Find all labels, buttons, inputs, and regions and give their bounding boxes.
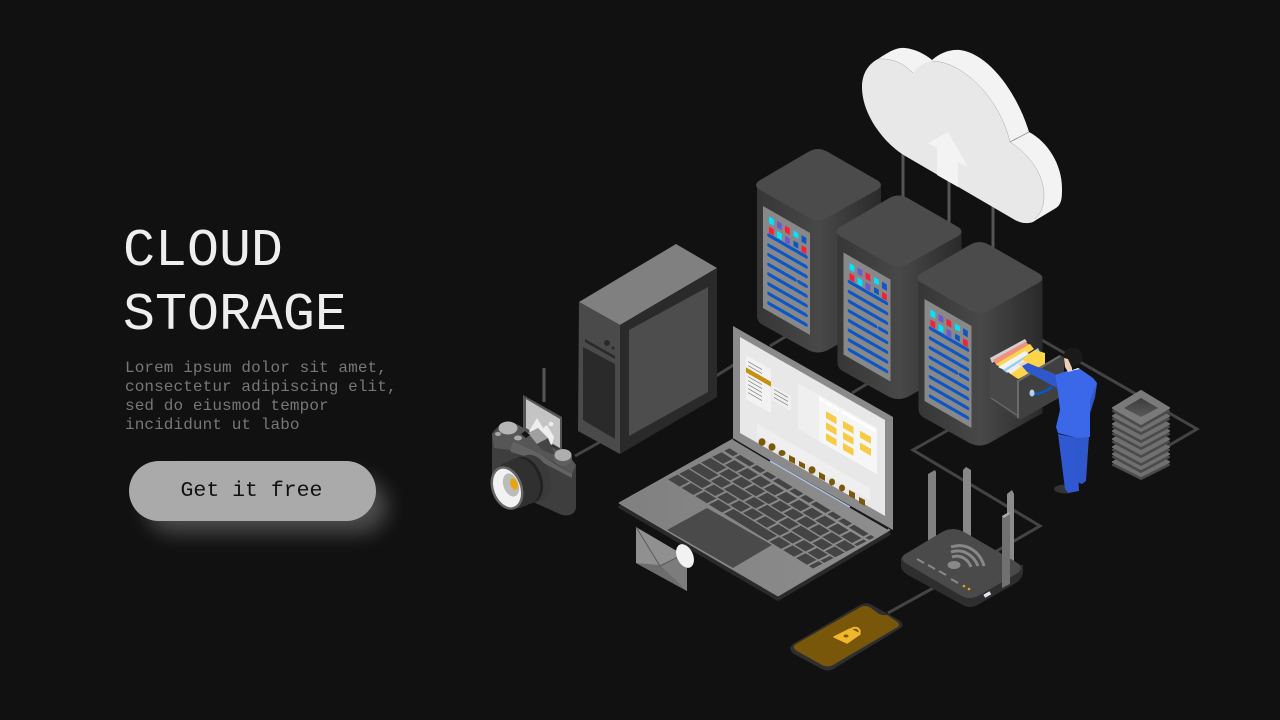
lens [485,450,557,514]
wifi router [901,467,1023,607]
icon dock [757,424,870,500]
laptop [619,326,893,600]
back antennas [928,467,1014,565]
hinge [733,439,770,461]
photo frame [523,395,562,450]
server rack 1 [756,149,881,352]
file list [746,355,771,413]
body text: incididunt ut labo [125,416,300,434]
button: get it free: Get it free [181,479,322,503]
upload arrow [928,132,968,187]
back leg [1075,436,1089,484]
title [123,222,347,346]
file drawer [990,339,1064,420]
connection lines [544,150,1197,613]
cloud with upload arrow [862,48,1062,223]
title: STORAGE [123,286,347,346]
lid [733,326,893,530]
wifi symbol [948,546,984,569]
body text: consectetur adipiscing elit, [125,378,397,396]
head [1064,348,1082,366]
lock icon [834,628,860,643]
folder panel [798,383,819,441]
camera body [492,422,576,515]
server rack 2 [836,196,962,399]
mail envelope with badge [636,527,698,591]
body text: Lorem ipsum dolor sit amet, [125,358,387,376]
front antenna [1002,512,1010,588]
base deck [619,439,890,596]
dials [498,422,518,434]
viewfinder [528,428,548,444]
folders [990,339,1045,379]
person in blue suit [1022,348,1097,494]
screen [740,337,885,516]
button: get it free [129,461,376,521]
notification badge [672,541,698,571]
desktop PC tower [578,244,717,454]
keyboard [673,450,872,566]
trackpad [667,508,772,568]
title: CLOUD [123,222,283,282]
router body [901,558,1023,607]
status slots [917,559,958,583]
smartphone with lock [790,603,902,670]
front leg and shoe [1054,484,1076,494]
reaching arm [1022,363,1057,388]
camera with photo [485,395,576,515]
body text [125,358,397,434]
dock icons [758,438,865,506]
face [1064,358,1072,372]
body text: sed do eiusmod tempor [125,397,329,415]
base underside [619,443,890,600]
server rack 3 [918,242,1042,446]
jacket [1055,369,1097,438]
top plate [492,423,576,474]
disk stack [1113,391,1169,479]
